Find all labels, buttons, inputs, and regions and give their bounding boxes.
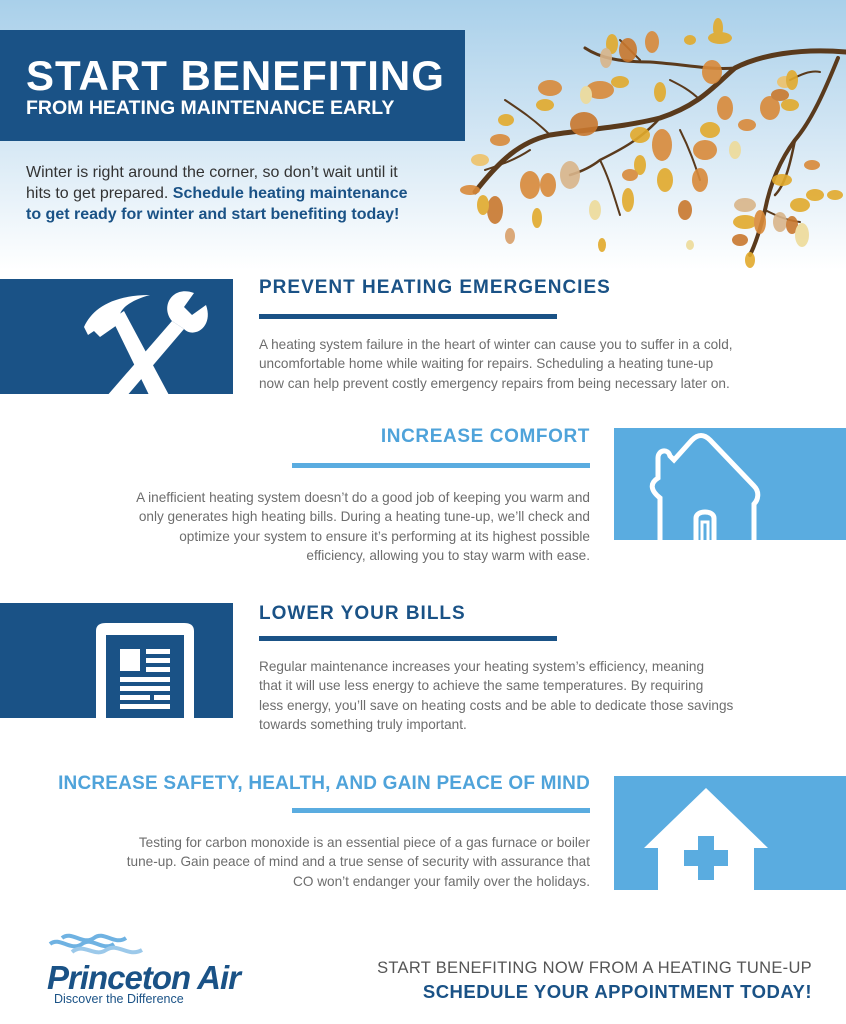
icon: house outline <box>614 428 846 540</box>
intro text <box>26 164 408 223</box>
panel: lower your bills <box>0 603 733 732</box>
heading: INCREASE SAFETY, HEALTH, AND GAIN PEACE OF MIND <box>58 773 590 794</box>
body text: tune-up. Gain peace of mind and a true sense of security with assurance that <box>127 854 590 869</box>
body text <box>126 835 590 889</box>
panel: increase safety <box>58 773 846 890</box>
tagline: Discover the Difference <box>54 992 184 1006</box>
wordmark: Princeton Air <box>47 959 240 996</box>
footer call to action: START BENEFITING NOW FROM A HEATING TUNE-UP <box>377 959 812 977</box>
footer call to action: SCHEDULE YOUR APPOINTMENT TODAY! <box>423 981 812 1002</box>
heading: PREVENT HEATING EMERGENCIES <box>259 277 611 298</box>
icon: hammer and wrench <box>0 279 233 394</box>
tree branch illustration <box>460 18 846 268</box>
logo: Princeton Air <box>47 934 242 1006</box>
body text: A inefficient heating system doesn’t do a good job of keeping you warm and <box>136 490 590 505</box>
body text: only generates high heating bills. During a heating tune-up, we’ll check and <box>139 509 590 524</box>
body text: CO won’t endanger your family over the holidays. <box>293 874 590 889</box>
body text <box>259 337 733 391</box>
body text: optimize your system to ensure it’s performing at its highest possible <box>179 529 590 544</box>
panel: prevent heating emergencies <box>0 277 733 394</box>
intro text: Winter is right around the corner, so don’t wait until it <box>26 164 398 181</box>
subtitle: FROM HEATING MAINTENANCE EARLY <box>26 97 394 119</box>
body text <box>259 659 733 732</box>
icon: air waves <box>48 934 143 954</box>
body text: Testing for carbon monoxide is an essential piece of a gas furnace or boiler <box>139 835 590 850</box>
heading: INCREASE COMFORT <box>381 426 590 447</box>
body text: towards something truly important. <box>259 717 467 732</box>
body text: efficiency, allowing you to stay warm with ease. <box>306 548 590 563</box>
icon: bill document <box>0 603 233 718</box>
title box <box>0 30 465 141</box>
panel: increase comfort <box>136 426 846 563</box>
icon: house with cross <box>614 776 846 890</box>
intro text: hits to get prepared. Schedule heating maintenance <box>26 185 408 202</box>
intro text: to get ready for winter and start benefiting today! <box>26 206 399 223</box>
body text: uncomfortable home while waiting for repairs. Scheduling a heating tune-up <box>259 356 713 371</box>
title: START BENEFITING <box>26 52 445 99</box>
body text: less energy, you’ll save on heating costs and be able to dedicate those savings <box>259 698 733 713</box>
heading: LOWER YOUR BILLS <box>259 603 466 624</box>
body text <box>136 490 590 563</box>
body text: A heating system failure in the heart of winter can cause you to suffer in a cold, <box>259 337 733 352</box>
footer call to action <box>377 959 812 1002</box>
body text: Regular maintenance increases your heating system’s efficiency, meaning <box>259 659 704 674</box>
body text: that it will use less energy to achieve the same temperatures. By requiring <box>259 678 703 693</box>
body text: now can help prevent costly emergency repairs from being necessary later on. <box>259 376 730 391</box>
